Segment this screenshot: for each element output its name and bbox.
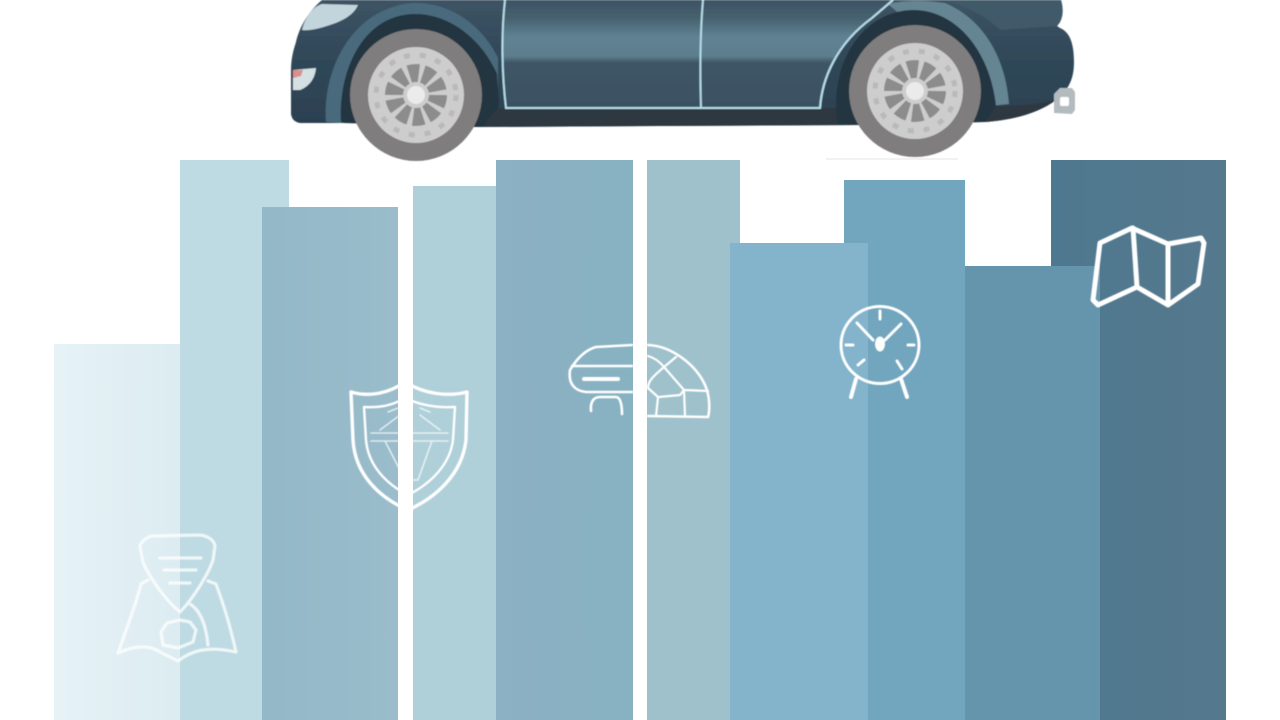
rear body highlight <box>940 0 1063 30</box>
front wheel arch <box>326 3 499 127</box>
door lines <box>502 0 893 108</box>
bar 2 <box>180 160 289 720</box>
car body <box>291 0 1074 127</box>
headlight <box>302 4 358 30</box>
bar 10 <box>1051 160 1226 720</box>
tow hook <box>1054 88 1075 114</box>
bar 7 <box>730 243 868 720</box>
bar 1 <box>54 344 180 720</box>
bar 4 <box>413 186 496 720</box>
dome right half <box>648 345 709 417</box>
rear wheel <box>849 25 981 157</box>
bar chart <box>54 160 1226 720</box>
door panels <box>502 0 893 108</box>
bar 9 <box>965 266 1100 720</box>
icon: dome <box>570 345 709 417</box>
car <box>291 0 1075 161</box>
dome left half <box>570 345 632 392</box>
icon: folded map <box>1093 228 1204 305</box>
fog light <box>293 68 316 90</box>
underbody shadow <box>470 108 860 127</box>
icon: clock <box>841 306 919 397</box>
bar 5 <box>496 160 633 720</box>
ground line <box>826 158 958 160</box>
bar 8 <box>844 180 965 720</box>
icon: map with pin <box>118 535 236 661</box>
bar 6 <box>647 160 740 720</box>
front wheel <box>350 29 482 161</box>
icon: shield <box>351 382 467 510</box>
rear wheel arch <box>820 0 1009 125</box>
bar 3 <box>262 207 398 720</box>
